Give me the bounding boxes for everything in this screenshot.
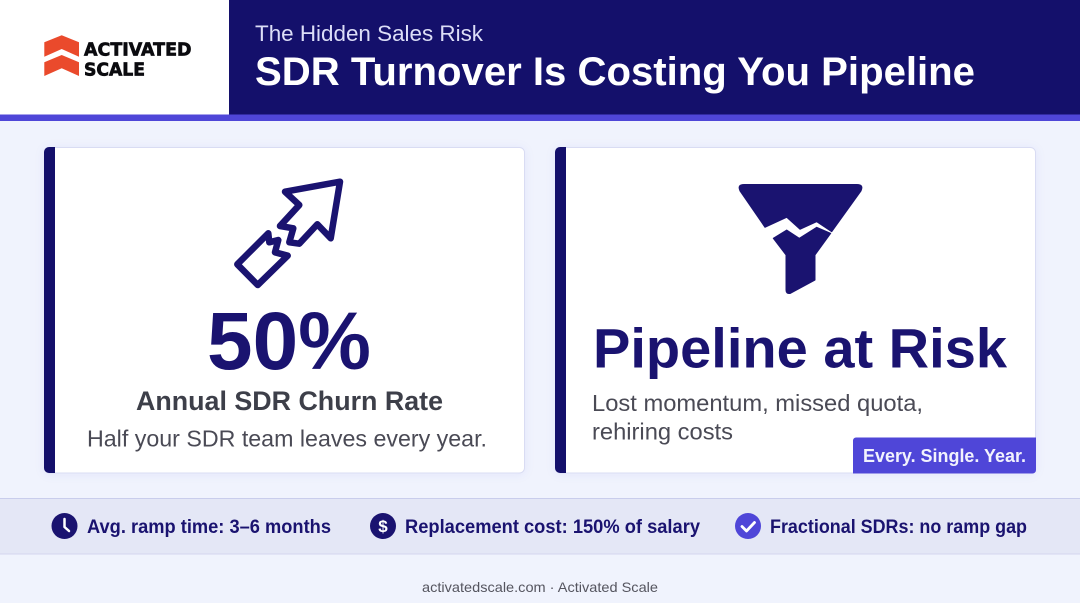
fact: ramp time	[52, 513, 331, 539]
icon: broken arrow	[237, 182, 340, 285]
icon: dollar	[370, 513, 396, 539]
heading: Pipeline at Risk	[593, 316, 1008, 380]
facts strip	[0, 498, 1080, 554]
icon: clock	[52, 513, 78, 539]
stat: 50%: 50%	[207, 296, 371, 387]
panel: pipeline at risk	[555, 147, 1036, 474]
fact: ramp time: Avg. ramp time: 3–6 months	[87, 517, 331, 538]
description: Lost momentum, missed quota,	[592, 390, 923, 416]
header title: SDR Turnover Is Costing You Pipeline	[255, 50, 975, 94]
logo wordmark	[84, 40, 192, 80]
panel: churn rate	[44, 147, 524, 473]
tag: every single year: Every. Single. Year.	[863, 446, 1026, 466]
fact: fractional SDRs: Fractional SDRs: no ramp gap	[770, 517, 1027, 538]
header kicker: The Hidden Sales Risk	[255, 21, 484, 46]
fact: replacement cost: Replacement cost: 150% of salary	[405, 517, 700, 538]
logo mark: chevrons	[44, 35, 79, 76]
stat description: Half your SDR team leaves every year.	[87, 426, 487, 452]
description	[592, 390, 923, 444]
fact: fractional SDRs	[735, 513, 1027, 539]
stat label: Annual SDR Churn Rate	[136, 386, 443, 416]
icon: cracked funnel	[739, 184, 862, 294]
footer: activatedscale.com · Activated Scale	[422, 579, 658, 595]
header accent stripe	[0, 114, 1080, 121]
header banner	[229, 0, 1080, 115]
icon: dollar: $	[378, 517, 388, 536]
logo wordmark: SCALE	[84, 60, 145, 80]
logo wordmark: ACTIVATED	[84, 40, 192, 60]
tag: every single year	[853, 438, 1036, 474]
icon: check	[735, 513, 761, 539]
description: rehiring costs	[592, 418, 733, 444]
logo panel	[0, 0, 229, 115]
